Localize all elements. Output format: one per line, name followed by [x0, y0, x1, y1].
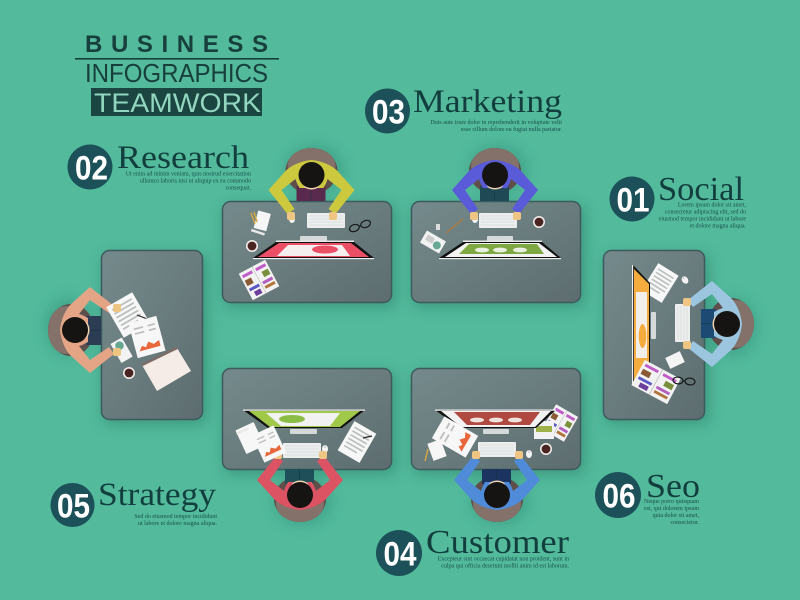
description: marketing: Duis aute irure dolor in reprehenderit in voluptate velit — [430, 120, 562, 126]
number badge 04: 04 — [384, 536, 417, 574]
description: social: et dolore magna aliqua. — [690, 224, 746, 230]
person: purple shirt — [452, 145, 538, 214]
description: social: eiusmod tempor incididunt ut labore — [659, 216, 746, 222]
coffee cup — [123, 367, 135, 379]
keyboard — [283, 443, 321, 458]
section 05 strategy label — [50, 477, 217, 527]
description: research: ullamco laboris nisi ut aliquip ex ea commodo — [140, 178, 251, 184]
card with teal badge — [110, 337, 133, 363]
description: social: Lorem ipsum dolor sit amet, — [678, 202, 746, 208]
document with sketch — [235, 422, 265, 454]
mouse and hands — [470, 212, 521, 223]
description: customer — [438, 556, 569, 570]
person: red shirt — [257, 456, 343, 525]
hands — [113, 304, 121, 356]
person: yellow shirt — [268, 145, 354, 214]
mouse — [526, 450, 532, 458]
description: research: consequat. — [226, 186, 251, 192]
number badge 01: 01 — [616, 182, 650, 220]
description: research — [126, 172, 251, 192]
monitor — [253, 236, 374, 259]
panel: strategy bottom workstation — [222, 368, 392, 525]
number badge 03: 03 — [372, 94, 405, 132]
desk — [412, 368, 580, 470]
description: social: consectetur adipiscing elit, sed do — [665, 210, 746, 216]
heading: teamwork: TEAMWORK — [94, 88, 261, 118]
magazine — [631, 360, 681, 404]
notepad and pencils — [251, 210, 271, 236]
number badge 02 — [68, 144, 112, 190]
desk shadows — [103, 205, 709, 474]
glasses — [673, 377, 695, 385]
section 04 customer label — [376, 524, 570, 576]
section 03 marketing label — [365, 84, 562, 134]
panel: strategy workstation (left desk) — [45, 250, 202, 420]
heading: research: Research — [117, 140, 250, 176]
desk — [604, 250, 704, 420]
description: strategy — [134, 514, 217, 527]
keyboard — [307, 213, 345, 228]
monitor — [243, 410, 365, 434]
glasses — [349, 219, 371, 233]
pen — [137, 315, 150, 320]
description: seo: quia dolor sit amet, — [653, 513, 699, 519]
heading: business: BUSINESS — [85, 31, 268, 58]
number badge 04 — [376, 530, 422, 576]
note with chart — [534, 421, 554, 439]
magazine — [542, 404, 578, 442]
keyboard — [479, 213, 517, 228]
description: customer: culpa qui officia deserunt mollit anim id est laborum. — [441, 562, 569, 570]
notepad — [427, 439, 447, 461]
section 01 social label — [610, 171, 746, 230]
heading: social: Social — [658, 171, 744, 208]
panel: social workstation — [604, 250, 757, 420]
description: social — [659, 202, 746, 230]
heading: customer: Customer — [426, 524, 570, 561]
number badge 05: 05 — [57, 488, 90, 526]
document — [641, 263, 679, 303]
heading: seo: Seo — [646, 468, 700, 505]
document — [106, 292, 150, 338]
hands — [472, 451, 523, 459]
desk — [412, 202, 580, 302]
coffee cup — [533, 216, 545, 228]
description: seo: est, qui dolorem ipsum — [644, 506, 699, 512]
number badge 02: 02 — [75, 150, 108, 188]
mouse — [322, 445, 328, 453]
heading: infographics: INFOGRAPHICS — [85, 58, 268, 88]
description: research: Ut enim ad minim veniam, quis nostrud exercitation — [126, 172, 251, 178]
title block — [75, 31, 279, 118]
pencil — [446, 219, 463, 233]
notebook — [142, 348, 191, 391]
coffee cup — [246, 240, 258, 252]
person: light blue shirt — [688, 281, 757, 367]
chart document — [432, 416, 478, 458]
chart document — [128, 316, 166, 358]
magazine — [239, 260, 279, 300]
monitor — [632, 265, 656, 385]
note — [665, 351, 685, 369]
description: seo — [644, 499, 699, 526]
monitor — [439, 236, 561, 259]
desk — [222, 368, 392, 470]
chart document — [252, 425, 286, 463]
mouse — [680, 275, 690, 285]
section 06 seo label — [595, 468, 700, 526]
description: strategy: Sed do eiusmod tempor incididunt — [134, 514, 217, 520]
hands — [274, 451, 327, 459]
panel: marketing workstation — [412, 145, 580, 302]
panel: customer workstation — [412, 368, 580, 525]
panel: research workstation — [222, 145, 392, 302]
description: strategy: ut labore et dolore magna aliqua. — [138, 521, 217, 527]
desk — [102, 250, 202, 420]
heading: strategy: Strategy — [98, 477, 217, 513]
description: customer: Excepteur sint occaecat cupidatat non proident, sunt in — [438, 556, 569, 562]
monitor — [435, 410, 556, 434]
pencil — [425, 449, 428, 461]
person: peach shirt — [45, 287, 114, 373]
description: seo: consectetur. — [670, 520, 699, 526]
heading: marketing: Marketing — [413, 84, 562, 120]
description: marketing — [430, 120, 562, 133]
description: marketing: esse cillum dolore eu fugiat nulla pariatur. — [461, 126, 562, 133]
strip — [236, 427, 249, 435]
section 02 research label — [68, 140, 251, 192]
keyboard — [478, 442, 516, 457]
description: seo: Neque porro quisquam — [644, 499, 699, 505]
coffee cup — [540, 443, 552, 455]
person: blue shirt — [454, 456, 540, 525]
hands — [683, 298, 691, 349]
number badge 06: 06 — [602, 478, 636, 516]
desk — [222, 202, 392, 302]
keyboard — [675, 304, 690, 342]
business card — [420, 230, 446, 254]
document stack — [338, 421, 376, 463]
mouse and hands — [287, 212, 337, 223]
small bottle — [436, 224, 440, 230]
pen — [363, 436, 372, 438]
